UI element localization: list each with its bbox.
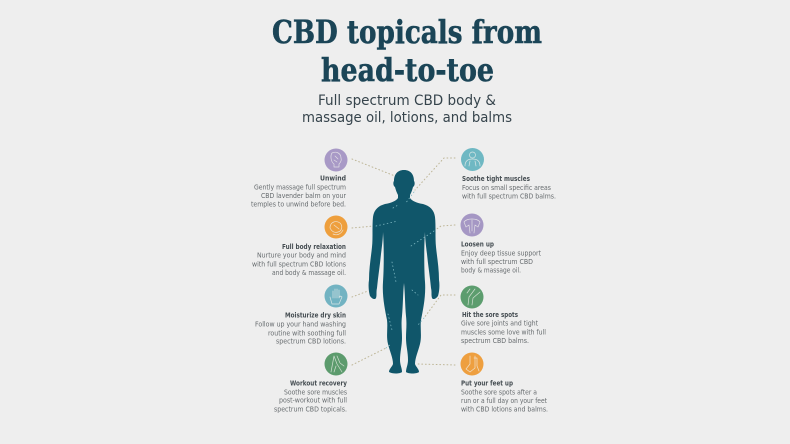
item: Moisturize dry skin: Follow up your hand washing — [255, 320, 346, 328]
item: Full body relaxation: Nurture your body and mind — [257, 252, 346, 260]
icon: blue hand — [324, 284, 348, 308]
item: Full body relaxation: Full body relaxation — [282, 243, 346, 251]
title: CBD topicals from — [272, 13, 542, 51]
item: Full body relaxation — [252, 216, 348, 277]
item: Unwind: CBD lavender balm on your — [261, 192, 346, 200]
item: Workout recovery: spectrum CBD topicals. — [274, 406, 347, 414]
item: Loosen up: Loosen up — [461, 240, 494, 248]
item: Put your feet up — [460, 352, 548, 414]
item: Hit the sore spots: Give sore joints and tight — [461, 320, 538, 328]
item: Put your feet up: with CBD lotions and balms. — [461, 406, 548, 414]
item: Moisturize dry skin: routine with soothing full — [268, 330, 346, 338]
item: Hit the sore spots: Hit the sore spots — [462, 311, 518, 319]
item: Soothe tight muscles: Soothe tight muscles — [462, 175, 530, 183]
item: Moisturize dry skin: Moisturize dry skin — [285, 312, 346, 320]
item: Soothe tight muscles: Focus on small specific areas — [462, 184, 551, 192]
item: Loosen up: body & massage oil. — [461, 266, 521, 274]
item: Workout recovery — [274, 352, 348, 414]
item: Soothe tight muscles — [461, 148, 556, 200]
item: Put your feet up: Soothe sore spots after a — [461, 388, 537, 396]
item: Moisturize dry skin: spectrum CBD lotions. — [276, 338, 346, 346]
icon: orange relaxation — [324, 216, 348, 238]
item: Put your feet up: Put your feet up — [461, 380, 513, 388]
icon: head purple — [324, 148, 348, 172]
item: Loosen up — [460, 214, 541, 274]
item: Unwind — [251, 148, 348, 208]
item: Workout recovery: Workout recovery — [290, 380, 347, 388]
item: Unwind: Unwind — [320, 174, 346, 182]
item: Hit the sore spots: muscles some love with full — [461, 328, 546, 336]
body silhouette — [369, 170, 439, 374]
subtitle — [302, 93, 512, 126]
item: Moisturize dry skin — [255, 284, 348, 346]
item: Unwind: Gently massage full spectrum — [254, 184, 346, 192]
item: Full body relaxation: and body & massage oil. — [272, 269, 346, 277]
subtitle: massage oil, lotions, and balms — [302, 110, 512, 126]
title — [272, 13, 542, 89]
item: Workout recovery: post-workout with full — [279, 396, 347, 404]
icon: purple back — [460, 214, 484, 236]
icon: green legs — [324, 352, 348, 376]
item: Loosen up: Enjoy deep tissue support — [461, 250, 541, 258]
body highlight specks — [376, 192, 434, 348]
item: Workout recovery: Soothe sore muscles — [284, 388, 347, 396]
item: Unwind: temples to unwind before bed. — [251, 200, 346, 208]
connector lines — [352, 158, 455, 365]
item: Hit the sore spots: spectrum CBD balms. — [461, 337, 529, 345]
item: Soothe tight muscles: with full spectrum CBD balms. — [462, 192, 556, 200]
item: Full body relaxation: with full spectrum CBD lotions — [252, 260, 346, 268]
item: Hit the sore spots — [460, 286, 546, 345]
icon: green knee — [460, 286, 484, 308]
icon: orange feet — [460, 352, 484, 376]
item: Put your feet up: run or a full day on your feet — [461, 397, 547, 405]
item: Loosen up: with full spectrum CBD — [461, 258, 533, 266]
title: head-to-toe — [321, 51, 494, 89]
icon: teal torso — [461, 148, 484, 171]
subtitle: Full spectrum CBD body & — [318, 93, 496, 109]
